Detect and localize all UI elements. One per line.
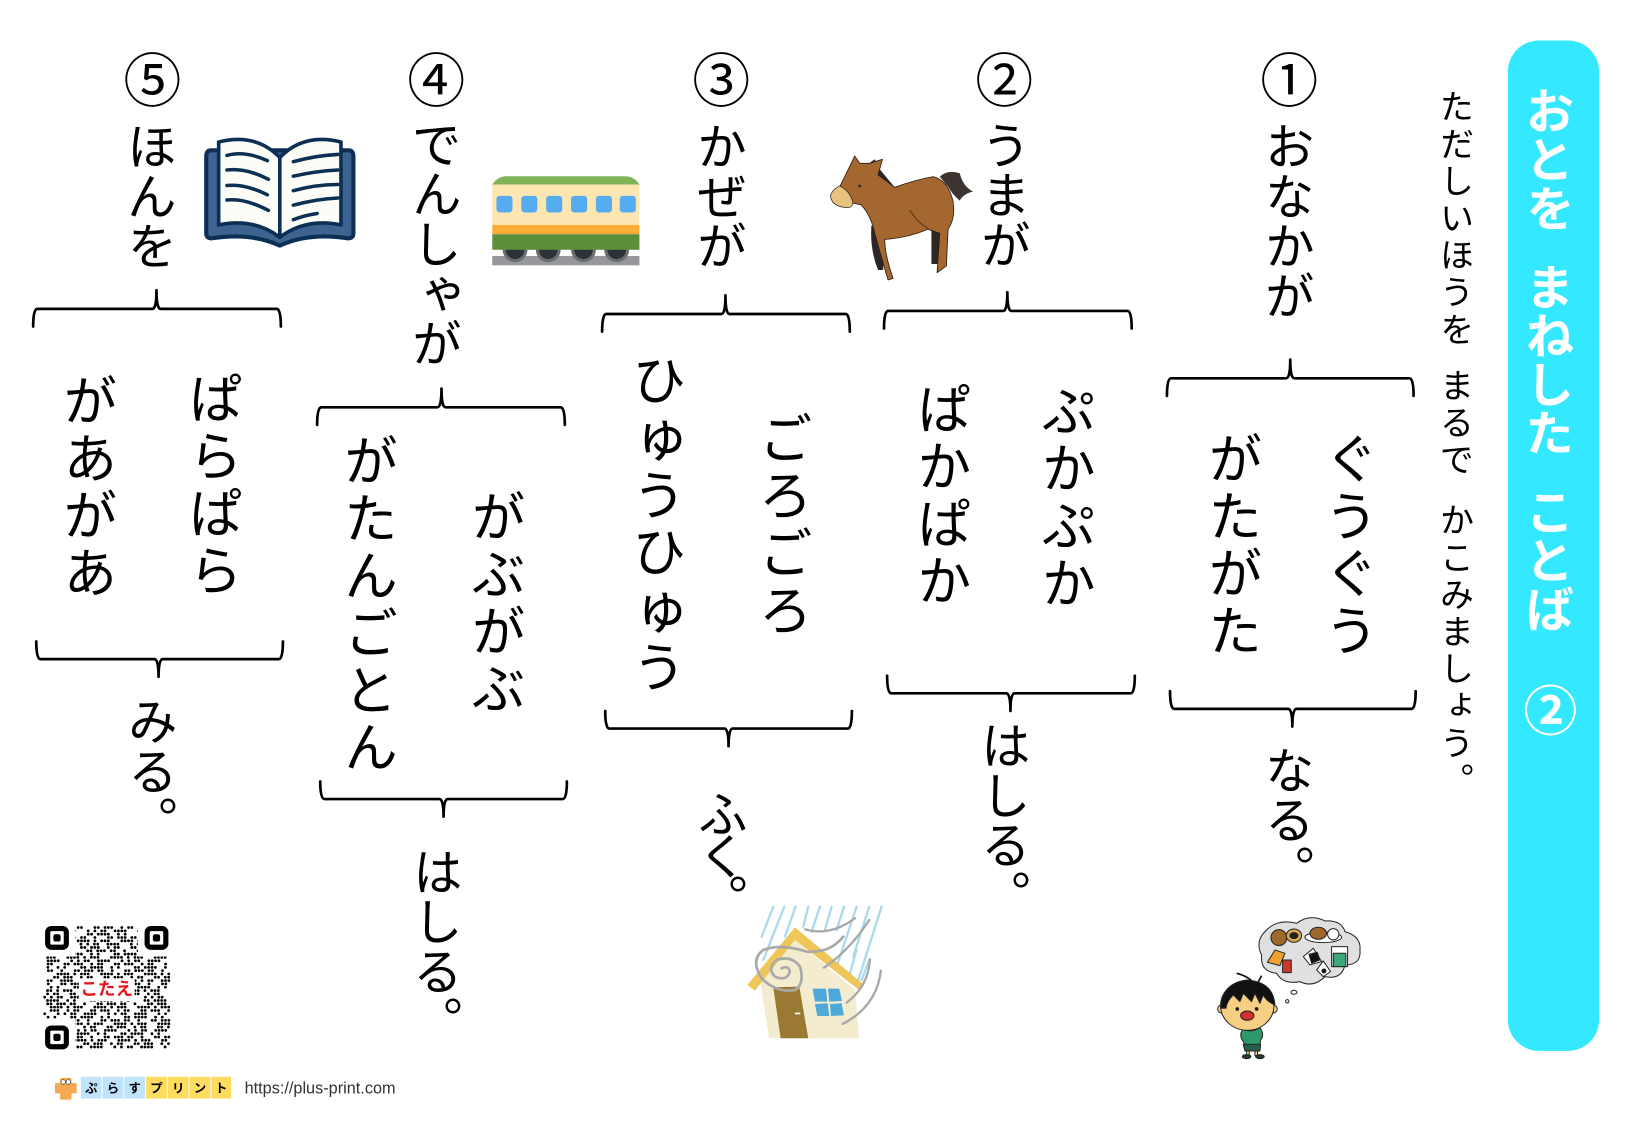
question 4: でんしゃが bbox=[405, 119, 461, 368]
question 4 bbox=[317, 50, 567, 1046]
question 1: ① bbox=[1260, 50, 1318, 115]
question 1: がたがた bbox=[1200, 431, 1260, 660]
footer logo: ら bbox=[107, 1081, 119, 1095]
footer logo: ぷ bbox=[85, 1081, 98, 1095]
question 3 bbox=[602, 50, 852, 916]
footer logo bbox=[56, 1077, 231, 1099]
question 1: ぐうぐう bbox=[1316, 431, 1376, 660]
icon: train bbox=[492, 176, 639, 265]
footer logo: プ bbox=[150, 1081, 163, 1095]
instruction text: かこみましょう。 bbox=[1434, 503, 1472, 799]
QR code with answer label: こたえ bbox=[80, 979, 133, 999]
icon: open book bbox=[206, 139, 353, 246]
question 2 bbox=[884, 50, 1135, 919]
instruction text: まるで bbox=[1434, 368, 1472, 479]
footer logo: す bbox=[129, 1081, 141, 1095]
question 1 bbox=[1167, 50, 1416, 894]
QR code with answer label bbox=[42, 923, 171, 1052]
question 2: ② bbox=[975, 50, 1033, 115]
title banner: まねした bbox=[1519, 262, 1573, 457]
question 5: ぱらぱら bbox=[180, 371, 240, 600]
footer logo: リ bbox=[172, 1081, 184, 1095]
title banner: ことば bbox=[1519, 487, 1573, 633]
icon: horse bbox=[830, 156, 973, 280]
question 3: ごろごろ bbox=[750, 410, 810, 640]
title banner: おとを bbox=[1519, 86, 1573, 232]
question 2: うまが bbox=[974, 120, 1030, 269]
question 5: ⑤ bbox=[123, 50, 181, 115]
question 4: がぶがぶ bbox=[463, 489, 524, 718]
question 4: はしる。 bbox=[406, 847, 462, 1046]
footer logo: ト bbox=[215, 1081, 227, 1095]
question 5 bbox=[33, 50, 283, 846]
question 2: ぱかぱか bbox=[909, 381, 969, 611]
question 3: かぜが bbox=[690, 121, 746, 271]
question 3: ひ ゅ う ひ ゅ う bbox=[616, 352, 684, 696]
question 2: ぷかぷか bbox=[1033, 383, 1094, 613]
question 5: みる。 bbox=[121, 696, 177, 846]
icon: hungry boy with thought bubble bbox=[1218, 918, 1360, 1059]
icon: house in a storm bbox=[747, 907, 882, 1038]
title banner bbox=[1508, 40, 1599, 1051]
question 2: はしる。 bbox=[974, 720, 1030, 919]
question 5: ほんを bbox=[120, 121, 176, 271]
instruction text bbox=[1434, 89, 1472, 799]
title banner: ② bbox=[1523, 683, 1577, 743]
footer url: https://plus-print.com bbox=[245, 1079, 396, 1097]
instruction text: ただしいほうを bbox=[1434, 89, 1472, 349]
question 1: おなかが bbox=[1258, 121, 1314, 320]
footer logo: ン bbox=[194, 1081, 206, 1095]
question 4: がたんごとん bbox=[336, 433, 396, 777]
question 4: ④ bbox=[407, 50, 465, 115]
question 3: ③ bbox=[692, 50, 750, 115]
question 3: ふく。 bbox=[691, 789, 747, 916]
question 1: なる。 bbox=[1258, 745, 1314, 894]
question 5: があがあ bbox=[55, 373, 115, 602]
